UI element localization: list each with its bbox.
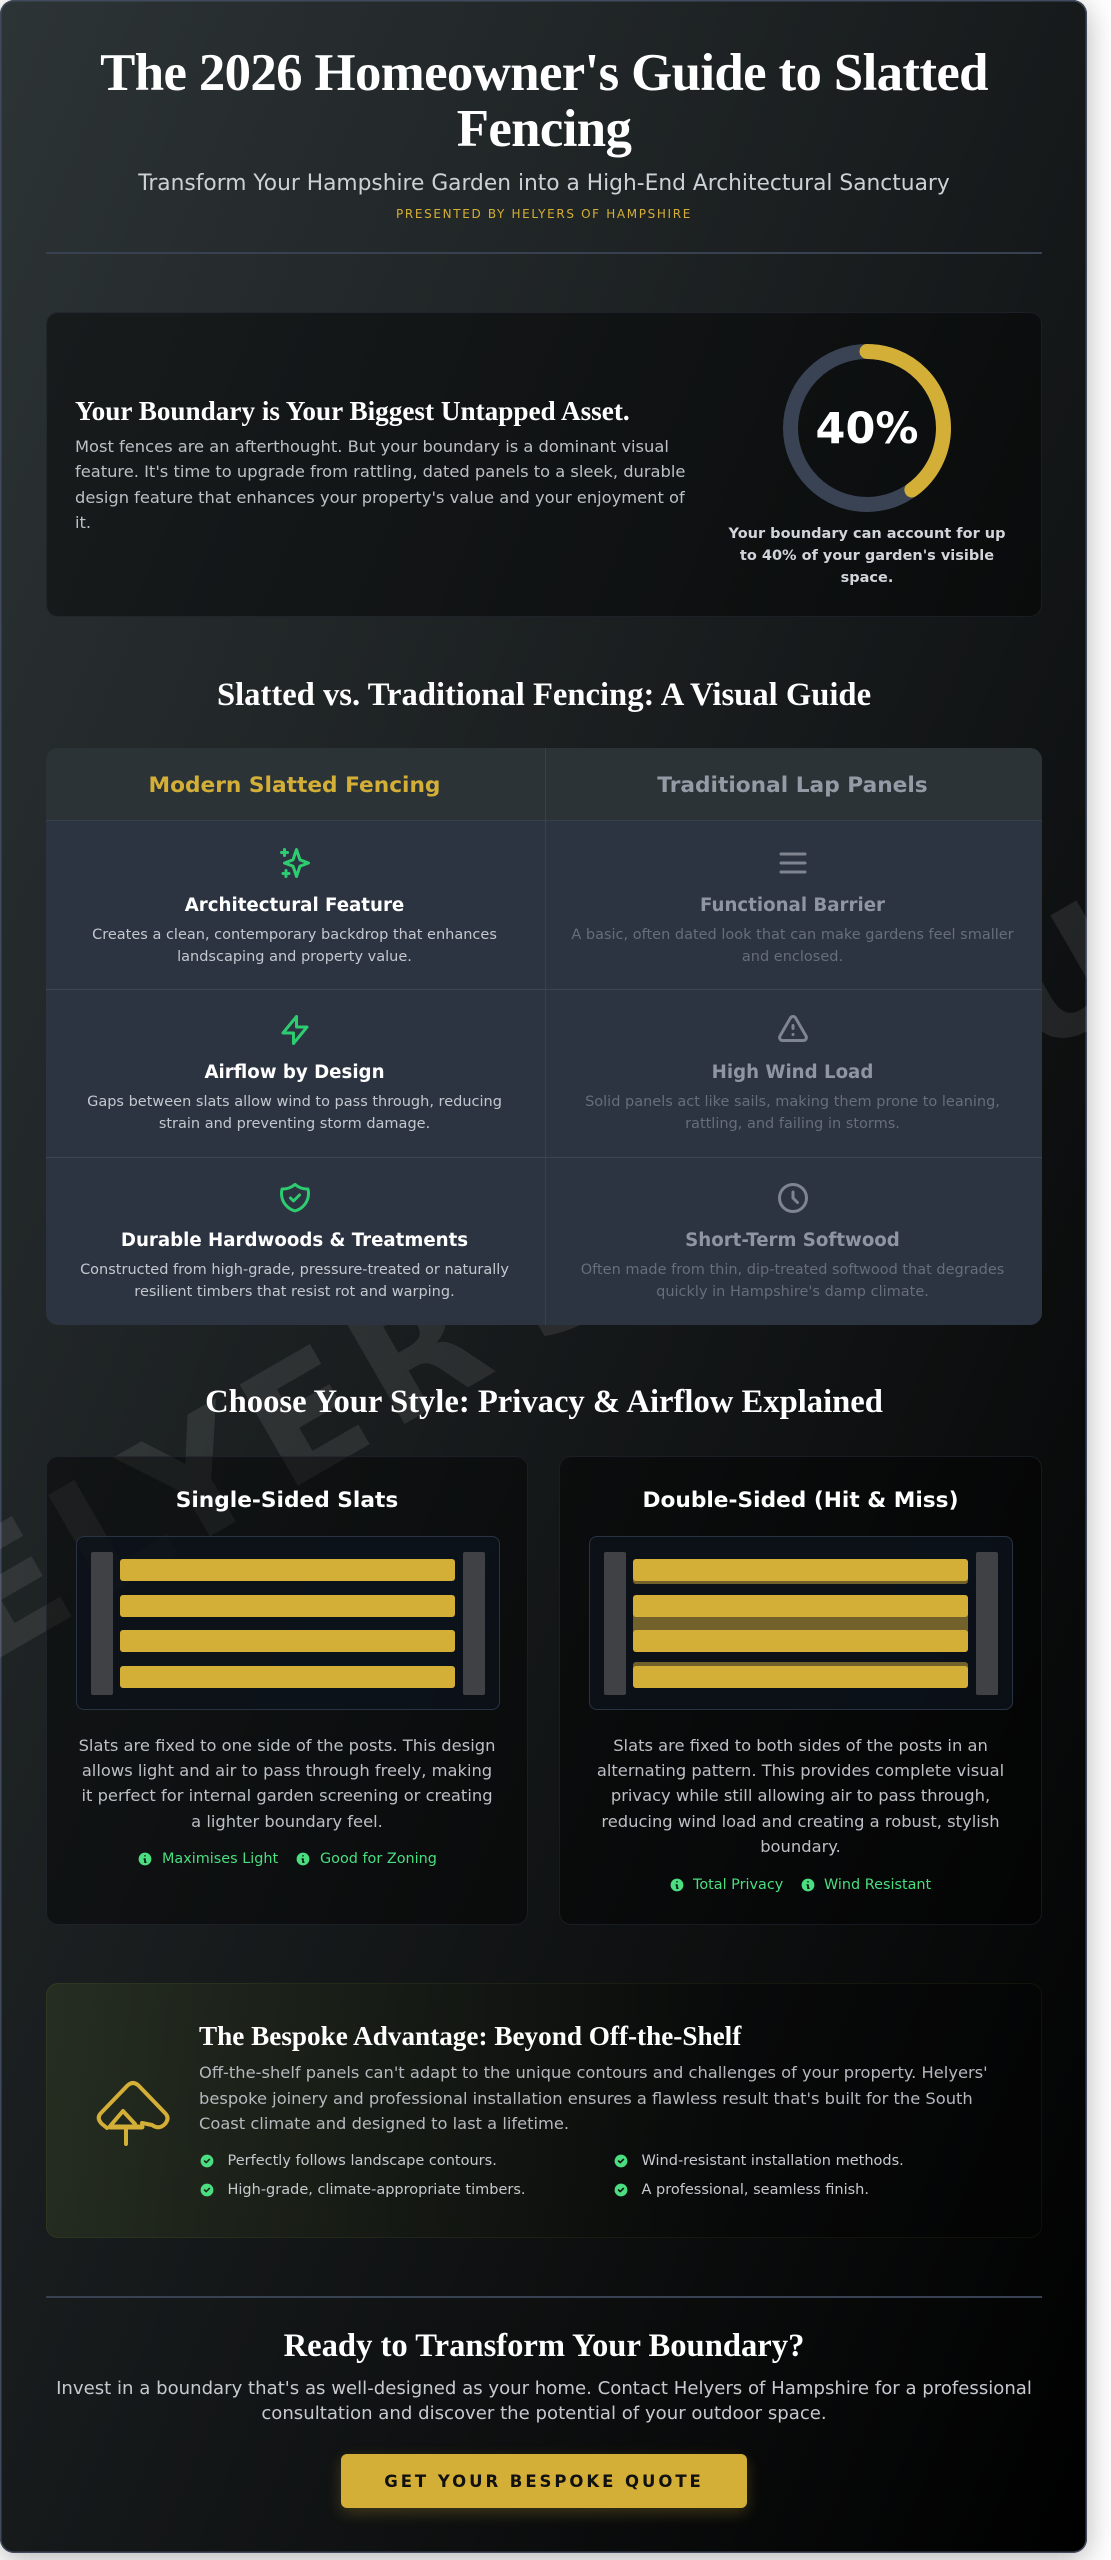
cell: functional barrier: and enclosed. <box>742 948 843 964</box>
panel text: bespoke joinery and professional installation ensures a flawless result that's built for the South <box>199 2088 973 2108</box>
tag: total privacy: Total Privacy <box>693 1877 783 1893</box>
donut caption <box>728 526 1005 586</box>
donut caption: space. <box>841 570 893 586</box>
section heading: style: Choose Your Style: Privacy & Airflow Explained <box>205 1384 883 1420</box>
cell: airflow: strain and preventing storm damage. <box>159 1116 430 1132</box>
list item 4: A professional, seamless finish. <box>642 2182 869 2198</box>
card text: Slats are fixed to one side of the posts. This design <box>79 1736 495 1754</box>
list item 1: Perfectly follows landscape contours. <box>228 2153 497 2169</box>
card text <box>597 1736 1004 1856</box>
title: The 2026 Homeowner's Guide to Slatted <box>100 44 988 102</box>
panel: boundary asset <box>46 312 1042 617</box>
header: slatted: Modern Slatted Fencing <box>149 773 440 798</box>
CTA text: consultation and discover the potential of your outdoor space. <box>261 2403 827 2424</box>
CTA text: Invest in a boundary that's as well-designed as your home. Contact Helyers of Hampshire for a professional <box>56 2378 1032 2398</box>
cell: softwood: Often made from thin, dip-treated softwood that degrades <box>581 1262 1004 1278</box>
icon: shield check <box>280 1182 310 1212</box>
table header <box>46 748 1042 821</box>
cell: wind load: Solid panels act like sails, making them prone to leaning, <box>585 1094 1000 1110</box>
CTA text <box>56 2378 1032 2424</box>
panel: double-sided slats <box>559 1456 1042 1925</box>
panel: bespoke advantage <box>46 1983 1042 2238</box>
icon: bespoke tree <box>96 2080 170 2146</box>
presenter line: PRESENTED BY HELYERS OF HAMPSHIRE <box>396 207 692 221</box>
icon: clock <box>778 1183 808 1213</box>
tag: wind resistant: Wind Resistant <box>824 1877 931 1893</box>
card text <box>79 1736 495 1831</box>
title <box>100 44 988 158</box>
panel text: design feature that enhances your property's value and your enjoyment of <box>75 488 685 506</box>
donut chart 40% <box>783 344 951 512</box>
icon: warning <box>778 1015 808 1042</box>
fence diagram: double <box>588 1536 1012 1710</box>
card text: allows light and air to pass through freely, making <box>82 1761 492 1780</box>
fence diagram: single <box>76 1536 500 1710</box>
list item 2: High-grade, climate-appropriate timbers. <box>228 2182 526 2198</box>
panel heading: The Bespoke Advantage: Beyond Off-the-Shelf <box>199 2020 741 2050</box>
cell: hardwoods: Constructed from high-grade, pressure-treated or naturally <box>80 1262 509 1278</box>
cell: hardwoods: Durable Hardwoods & Treatments <box>121 1230 468 1251</box>
panel text <box>75 436 686 532</box>
icon: lightning <box>282 1015 309 1045</box>
donut chart 40%: 40% <box>816 404 918 454</box>
card text: privacy while still allowing air to pass through, <box>611 1786 990 1805</box>
cell: functional barrier <box>571 852 1014 964</box>
cell: architectural feature: Architectural Feature <box>185 894 404 916</box>
panel text: Most fences are an afterthought. But your boundary is a dominant visual <box>75 436 669 456</box>
cell: airflow: Airflow by Design <box>204 1062 385 1083</box>
cell: wind load: High Wind Load <box>712 1062 873 1083</box>
cell: airflow: Gaps between slats allow wind to pass through, reducing <box>87 1094 502 1110</box>
panel text: it. <box>75 513 91 532</box>
cell: architectural feature: landscaping and property value. <box>177 948 412 964</box>
cell: functional barrier: Functional Barrier <box>700 894 885 916</box>
cell: functional barrier: A basic, often dated look that can make gardens feel smaller <box>571 926 1014 942</box>
section heading: visual guide: Slatted vs. Traditional Fencing: A Visual Guide <box>217 677 871 713</box>
card title: Double-Sided (Hit & Miss) <box>642 1488 958 1512</box>
header <box>100 44 988 221</box>
cell: architectural feature: Creates a clean, contemporary backdrop that enhances <box>92 926 497 942</box>
title: Fencing <box>457 100 631 158</box>
CTA button: GET YOUR BESPOKE QUOTE <box>384 2472 704 2491</box>
card text: boundary. <box>760 1837 841 1856</box>
icon: menu lines <box>780 852 806 874</box>
cell: softwood <box>581 1183 1004 1300</box>
card title: Single-Sided Slats <box>176 1488 398 1512</box>
panel text <box>199 2063 988 2133</box>
card text: it perfect for internal garden screening or creating <box>81 1786 493 1805</box>
header: traditional: Traditional Lap Panels <box>657 773 928 798</box>
list item 3: Wind-resistant installation methods. <box>642 2153 904 2169</box>
card text: reducing wind load and creating a robust, stylish <box>601 1812 1000 1831</box>
donut caption: to 40% of your garden's visible <box>740 548 994 564</box>
cell: softwood: quickly in Hampshire's damp climate. <box>656 1284 929 1300</box>
cell: hardwoods: resilient timbers that resist rot and warping. <box>134 1284 455 1300</box>
cell: softwood: Short-Term Softwood <box>685 1230 900 1251</box>
donut caption: Your boundary can account for up <box>729 526 1005 542</box>
cell: hardwoods <box>80 1182 509 1300</box>
tag: good for zoning: Good for Zoning <box>320 1851 437 1867</box>
panel text: Off-the-shelf panels can't adapt to the unique contours and challenges of your property. Helyers' <box>199 2063 988 2082</box>
cell: airflow <box>87 1015 502 1132</box>
panel heading: Your Boundary is Your Biggest Untapped Asset. <box>75 396 630 426</box>
card text: alternating pattern. This provides complete visual <box>597 1761 1004 1780</box>
card text: Slats are fixed to both sides of the posts in an <box>613 1736 988 1754</box>
cell: wind load <box>585 1015 1000 1132</box>
comparison table <box>46 748 1042 1325</box>
card text: a lighter boundary feel. <box>191 1812 383 1831</box>
CTA heading: Ready to Transform Your Boundary? <box>284 2328 804 2364</box>
tag: maximises light: Maximises Light <box>162 1851 278 1867</box>
icon: sparkles <box>280 848 310 878</box>
panel text: Coast climate and designed to last a lifetime. <box>199 2114 569 2133</box>
panel: single-sided slats <box>46 1456 528 1925</box>
panel text: feature. It's time to upgrade from rattling, dated panels to a sleek, durable <box>75 462 685 481</box>
call to action <box>56 2328 1032 2520</box>
CTA button <box>341 2454 747 2508</box>
subtitle: Transform Your Hampshire Garden into a High-End Architectural Sanctuary <box>138 170 950 196</box>
cell: wind load: rattling, and failing in storms. <box>685 1116 900 1132</box>
cell: architectural feature <box>92 848 497 964</box>
